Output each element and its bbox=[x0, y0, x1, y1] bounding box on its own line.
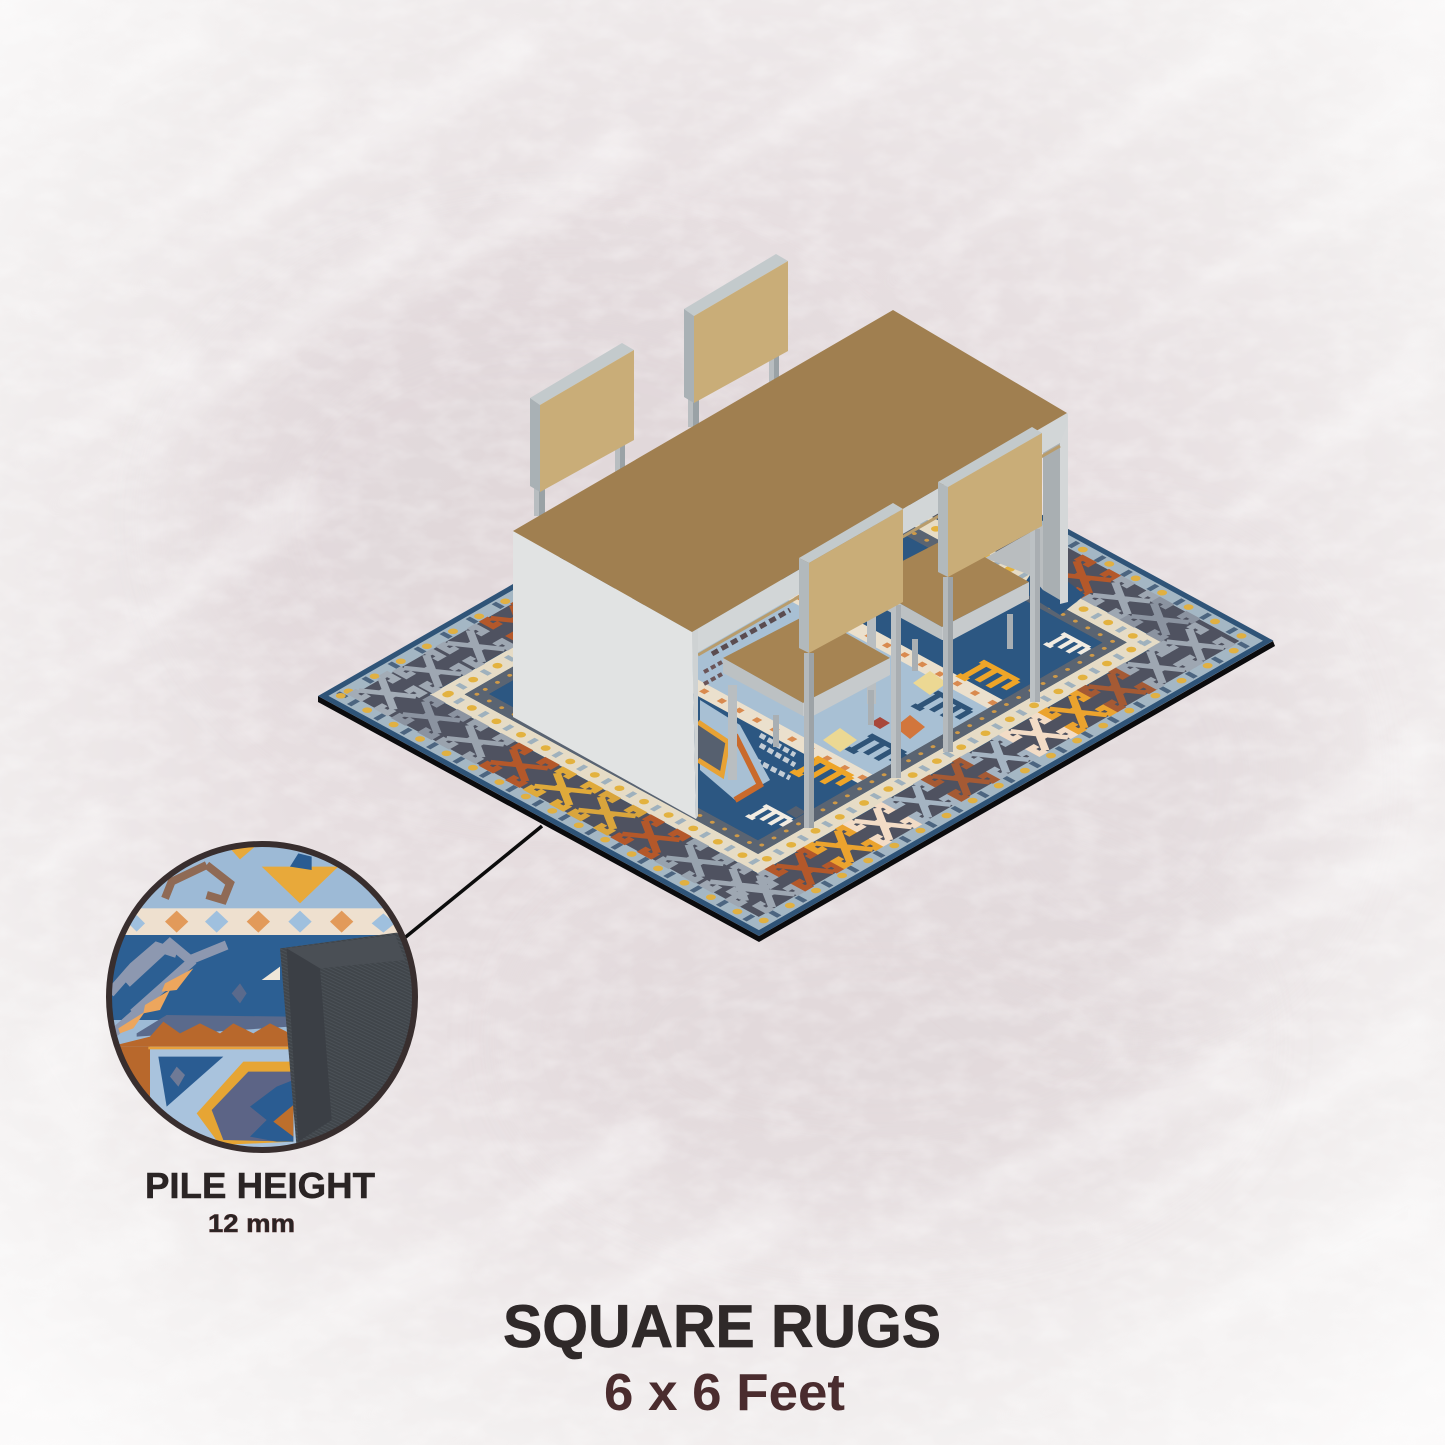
chair: front left bbox=[723, 503, 903, 828]
band motifs: bottom-right side bbox=[731, 625, 1230, 911]
title: square rugs: SQUARE RUGS bbox=[503, 1293, 941, 1360]
backrest bbox=[938, 427, 1042, 487]
rug field motifs bbox=[698, 560, 1089, 830]
rug backing flap bbox=[280, 932, 412, 1143]
chair: front right bbox=[862, 427, 1042, 752]
central light band bbox=[589, 554, 1003, 783]
seat bbox=[862, 537, 1029, 627]
label: pile height: PILE HEIGHT bbox=[145, 1165, 375, 1206]
table side panel bbox=[513, 531, 696, 819]
seat bbox=[723, 613, 890, 703]
under-table shaded face bbox=[985, 525, 1043, 590]
far table leg bbox=[1043, 418, 1060, 600]
rug surface bands bbox=[318, 401, 1273, 936]
label: 12 mm: 12 mm bbox=[208, 1210, 295, 1238]
backrest bbox=[799, 503, 903, 563]
table apron bbox=[692, 413, 1067, 655]
leader line from rug to detail circle bbox=[402, 826, 542, 940]
legs bbox=[867, 609, 876, 704]
table: white frame with brown top bbox=[513, 310, 1068, 819]
table top bbox=[513, 310, 1067, 632]
rug thickness shadow bbox=[318, 641, 1275, 942]
legs bbox=[728, 685, 737, 780]
subtitle: size: 6 x 6 Feet bbox=[604, 1364, 845, 1422]
detail circle: rug pile and backing close-up bbox=[106, 841, 418, 1153]
band motifs: bottom-left side bbox=[352, 674, 774, 904]
chair: rear left and rear centre, behind table bbox=[530, 254, 788, 516]
rug: isometric patterned square rug bbox=[318, 401, 1275, 942]
band motifs: upper-left and upper-right sides bbox=[398, 422, 1195, 869]
